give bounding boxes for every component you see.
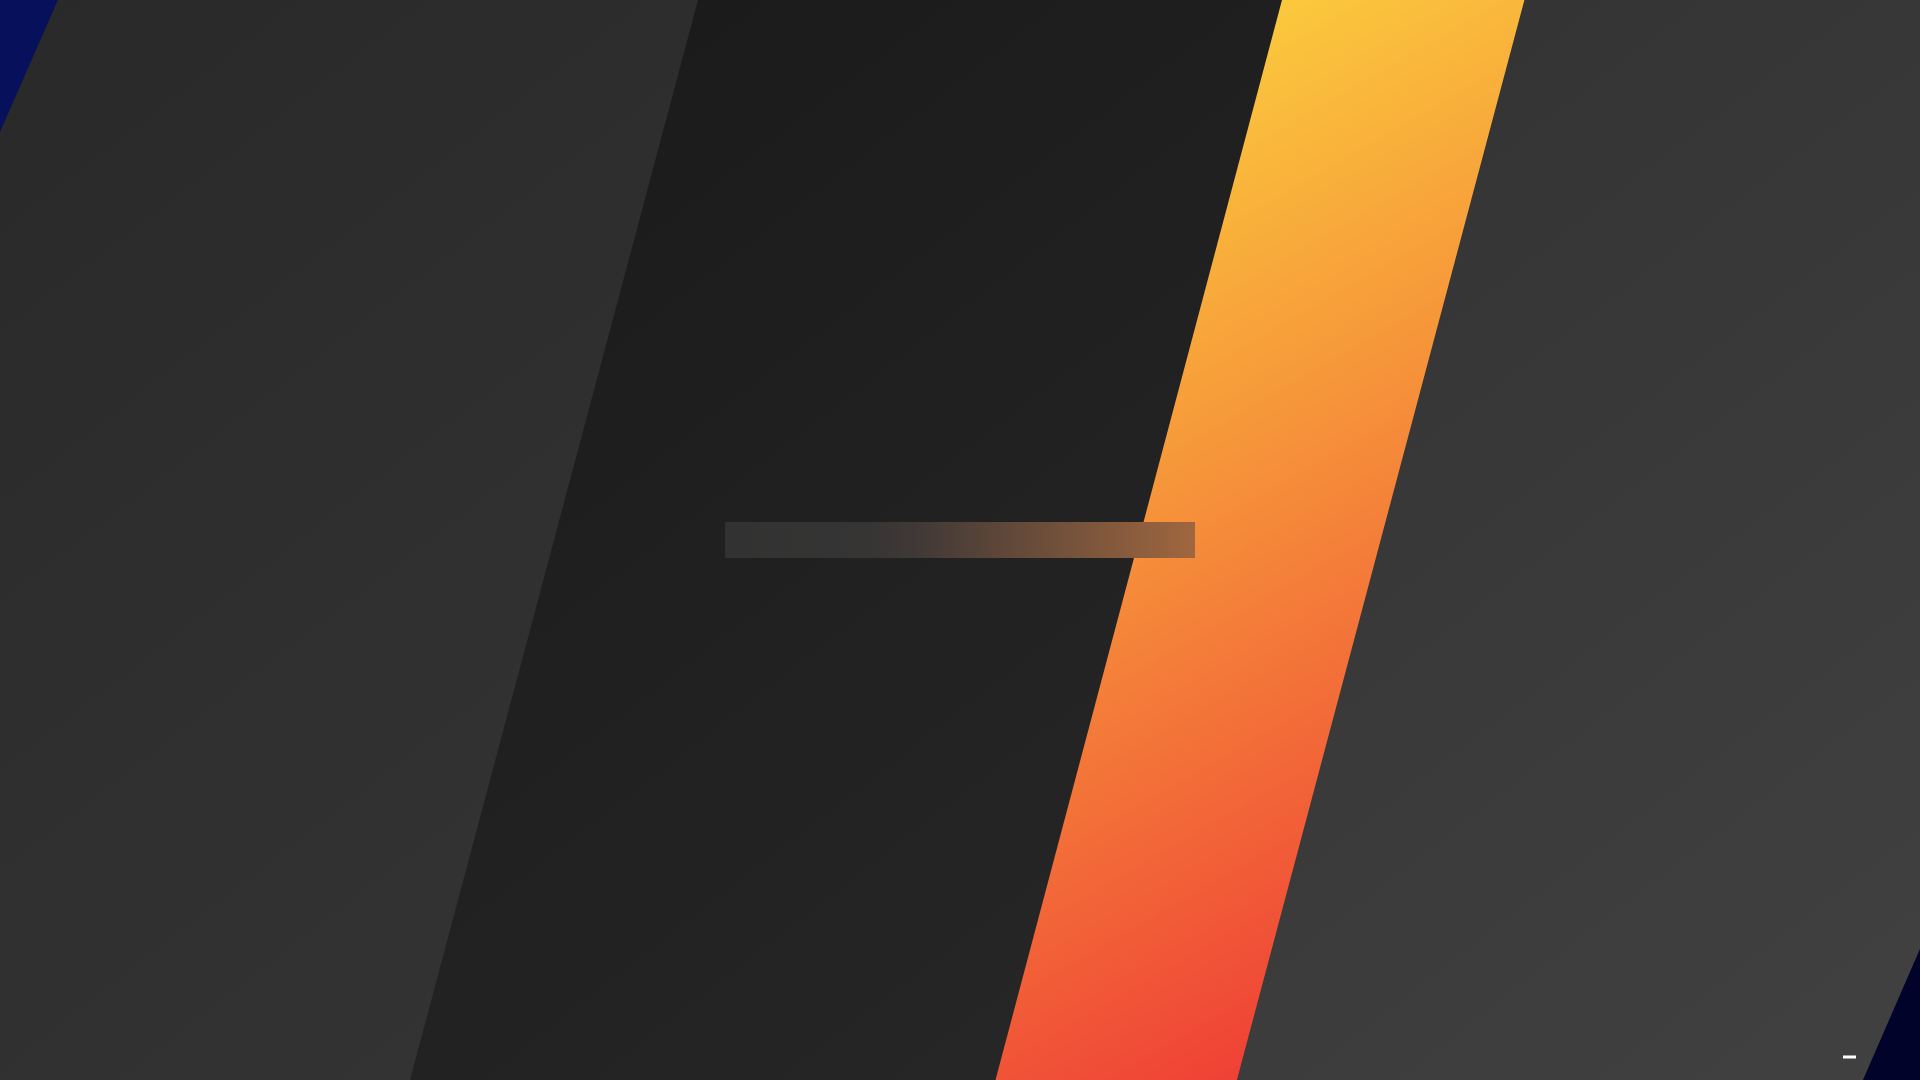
panel: navy corner bottom right <box>1863 949 1920 1080</box>
panel: left grey band <box>0 0 698 1080</box>
panel: orange gradient band <box>996 0 1524 1080</box>
dash mark <box>1843 1056 1856 1058</box>
panel: navy corner top left <box>0 0 58 132</box>
panel: right grey band <box>1237 0 1920 1080</box>
progress bar <box>725 522 1195 558</box>
